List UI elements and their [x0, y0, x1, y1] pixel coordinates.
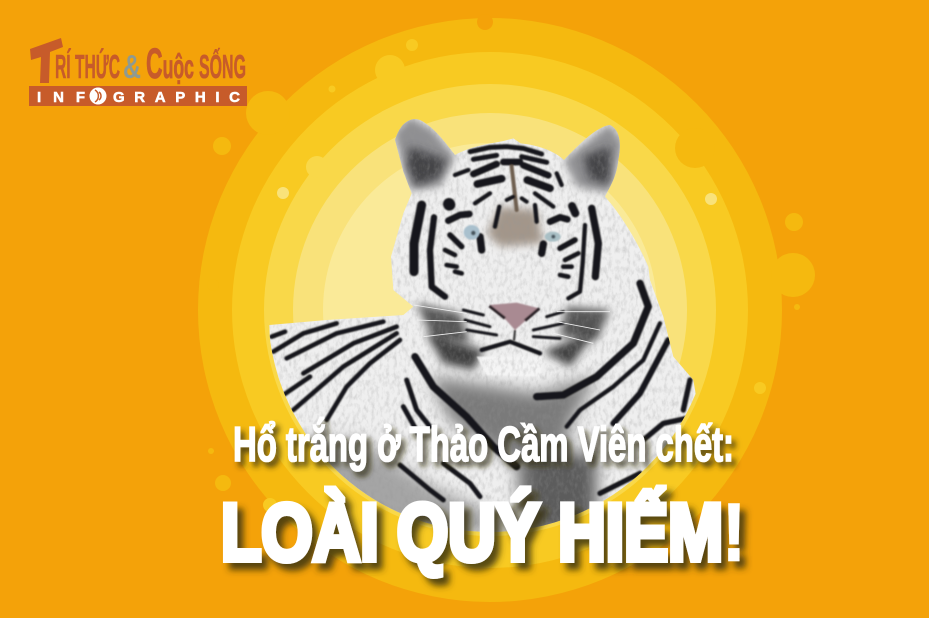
infographic canvas: SỐNG [199, 47, 246, 85]
white tiger photo [269, 119, 696, 532]
neck stripes [415, 357, 517, 467]
muzzle stripes [463, 310, 563, 338]
tiger silhouette [269, 119, 696, 532]
tiger stripes [272, 147, 690, 500]
band target icon [90, 88, 106, 104]
logo T mark [30, 38, 63, 83]
tiger nose [489, 303, 539, 341]
tiger eyes [464, 225, 561, 242]
logo [29, 38, 247, 106]
cheek stripes [431, 186, 467, 223]
logo word cuoc: Cuộc [146, 40, 194, 88]
logo: RÍ THỨC [55, 48, 120, 85]
concentric sun rings [198, 14, 815, 602]
eye stripes [448, 214, 567, 222]
band letters GRAPHIC: GRAPHIC [113, 89, 240, 106]
main title: LOÀI QUÝ HIẾM! [221, 487, 745, 578]
logo ampersand: & [123, 48, 141, 85]
forehead stripes [470, 147, 547, 162]
fur shading [243, 117, 623, 533]
tiger whiskers [413, 305, 610, 343]
infographic canvas [29, 18, 815, 602]
logo infographic band [29, 86, 247, 106]
fur texture [270, 119, 696, 521]
band letters INF: INF [37, 89, 85, 106]
left body stripes [272, 322, 400, 420]
